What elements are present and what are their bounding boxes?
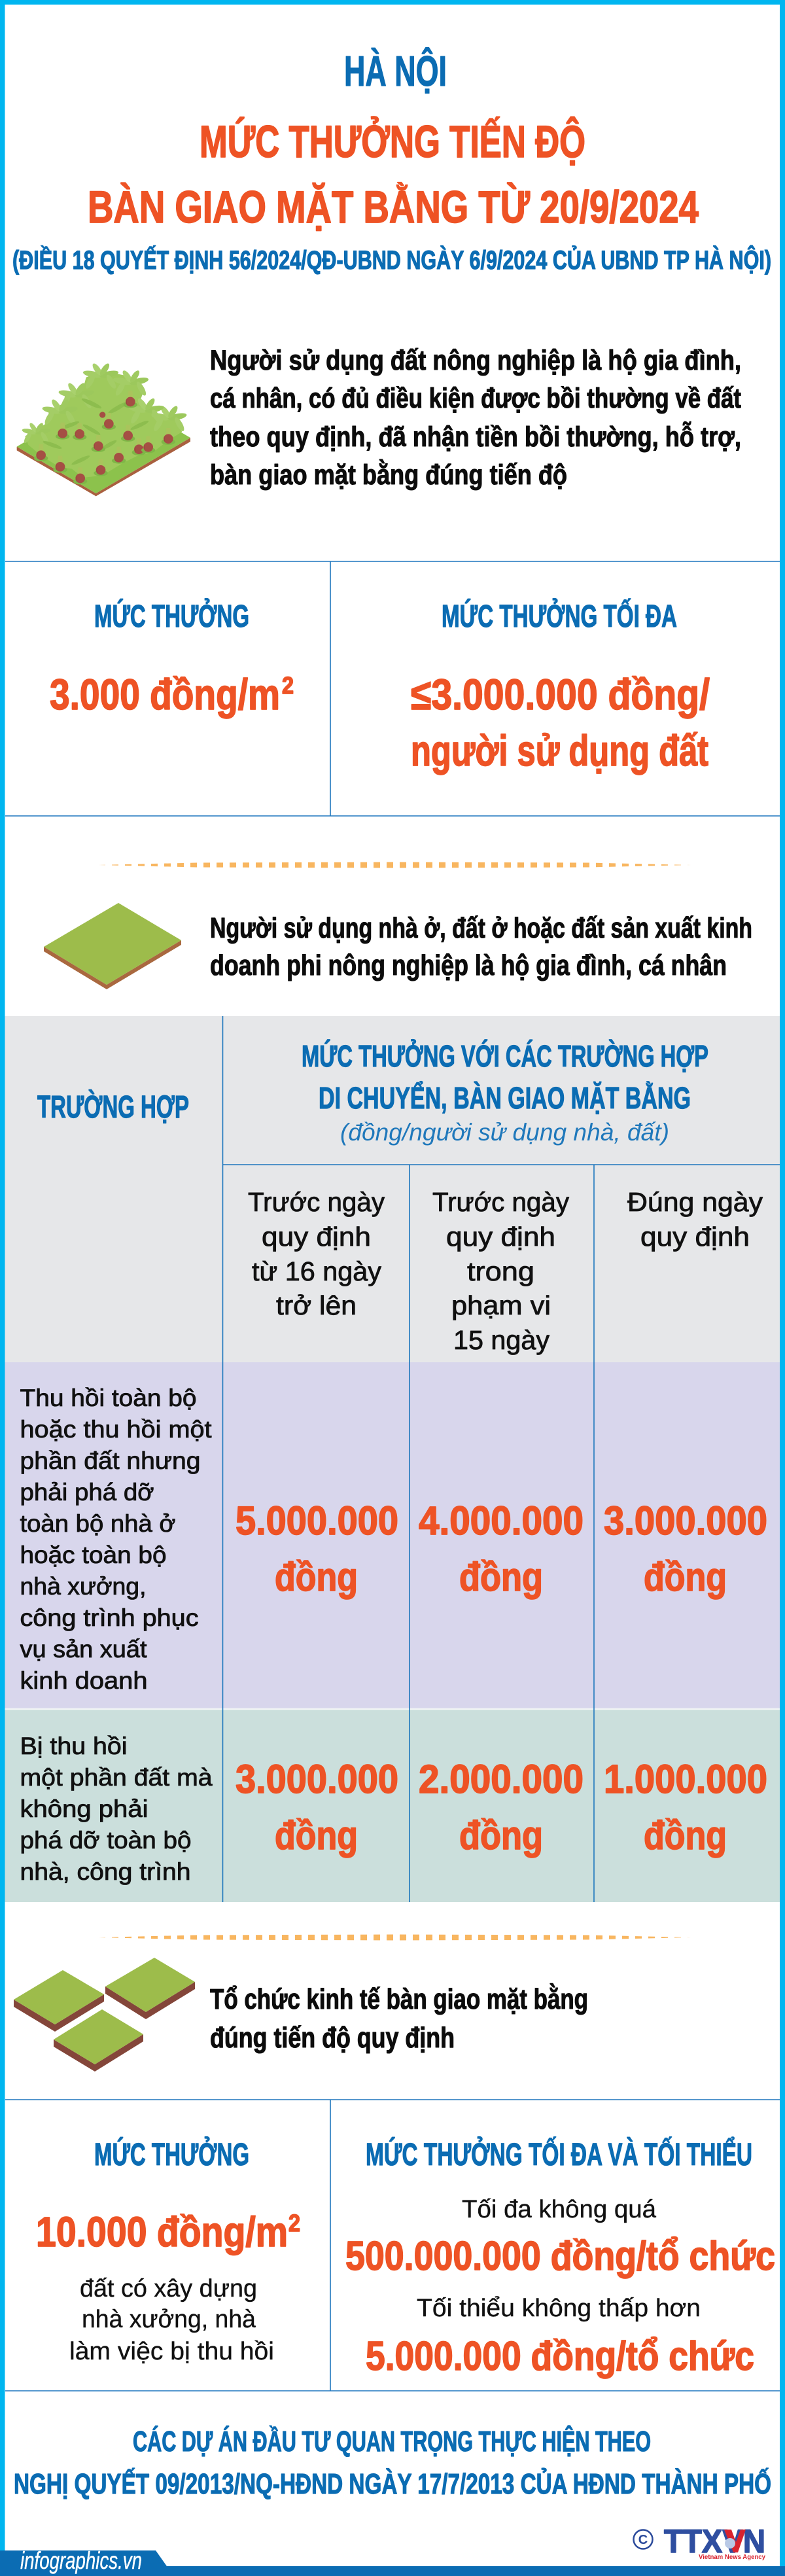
row 1 values: 3.000.000 <box>604 1498 767 1543</box>
row label: full recovery <box>20 1385 212 1694</box>
row label: full recovery: phần đất nhưng <box>20 1447 200 1474</box>
note: land with buildings <box>69 2275 274 2365</box>
column: 16 days or more before: từ 16 ngày <box>252 1256 381 1286</box>
footer bar: infographics.vn <box>0 2547 785 2576</box>
logo: TTXVN: C <box>638 2533 648 2547</box>
row label: full recovery: toàn bộ nhà ở <box>20 1510 175 1537</box>
row label: full recovery: hoặc thu hồi một <box>20 1416 212 1443</box>
text block: agricultural land users: bàn giao mặt bằng đúng tiến độ <box>210 459 567 491</box>
column: on the set date: quy định <box>640 1222 750 1252</box>
row label: full recovery: công trình phục <box>20 1604 199 1631</box>
column: 16 days or more before: Trước ngày <box>248 1187 385 1217</box>
heading: reward level: MỨC THƯỞNG <box>94 598 249 634</box>
row label: partial recovery: phá dỡ toàn bộ <box>20 1827 191 1854</box>
row 2 values: đồng <box>644 1813 727 1858</box>
text block: economic organisations: đúng tiến độ quy định <box>210 2022 455 2054</box>
logo: TTXVN: TTXVN <box>664 2523 765 2560</box>
divider <box>99 1934 690 1941</box>
column: within 15 days before: phạm vi <box>451 1290 551 1320</box>
row label: full recovery: Thu hồi toàn bộ <box>20 1385 196 1411</box>
row label: partial recovery: không phải <box>20 1795 148 1822</box>
column: within 15 days before: 15 ngày <box>453 1325 550 1355</box>
note: land with buildings: đất có xây dựng <box>80 2275 257 2303</box>
row 1 values: đồng <box>275 1555 358 1599</box>
column: 16 days or more before: quy định <box>262 1222 371 1252</box>
logo: TTXVN: Vietnam News Agency <box>699 2554 765 2561</box>
superscript: 2 <box>282 672 294 699</box>
label: maximum: Tối đa không quá <box>462 2196 657 2223</box>
row 2 values <box>236 1757 767 1858</box>
row 2 values: đồng <box>275 1813 358 1858</box>
text block: residential land users <box>210 912 752 981</box>
column: on the set date: Đúng ngày <box>627 1187 763 1217</box>
heading: Hà Nội: HÀ NỘI <box>344 47 447 95</box>
row label: full recovery: hoặc toàn bộ <box>20 1542 166 1568</box>
row 1 values: đồng <box>644 1555 727 1599</box>
title block <box>12 47 771 275</box>
text block: agricultural land users <box>210 345 741 491</box>
row 1 values: 5.000.000 <box>236 1498 398 1543</box>
footer note: key investment projects <box>14 2425 771 2500</box>
footer bar: infographics.vn: infographics.vn <box>20 2547 142 2574</box>
row label: partial recovery: một phần đất mà <box>20 1764 213 1791</box>
icon: palm plantation plot <box>17 362 190 496</box>
row 2 values: 3.000.000 <box>236 1757 398 1801</box>
note: land with buildings: làm việc bị thu hồi <box>69 2338 274 2365</box>
column: 16 days or more before: trở lên <box>276 1290 357 1320</box>
row label: full recovery: nhà xưởng, <box>20 1573 147 1600</box>
row label: full recovery: phải phá dỡ <box>20 1479 154 1506</box>
column: 16 days or more before <box>248 1187 385 1320</box>
row label: partial recovery: Bị thu hồi <box>20 1733 127 1759</box>
superscript: 2 <box>288 2210 300 2236</box>
column header: case: TRƯỜNG HỢP <box>37 1089 189 1125</box>
value: maximum reward amount: ≤3.000.000 đồng/ <box>411 670 710 718</box>
panel: agricultural land reward <box>5 561 780 816</box>
icon: three land plots <box>14 1958 195 2072</box>
text block: economic organisations <box>210 1983 588 2054</box>
column: within 15 days before <box>432 1187 569 1355</box>
column: within 15 days before: quy định <box>446 1222 555 1252</box>
row label: partial recovery <box>20 1733 213 1885</box>
column header: reward group <box>302 1039 708 1146</box>
row 2 values: 2.000.000 <box>419 1757 584 1801</box>
column: within 15 days before: Trước ngày <box>432 1187 569 1217</box>
panel: organisation reward <box>5 2100 780 2391</box>
label: minimum: Tối thiểu không thấp hơn <box>417 2295 701 2322</box>
divider <box>99 862 690 868</box>
heading: maximum reward: MỨC THƯỞNG TỐI ĐA <box>442 598 677 634</box>
column header: reward group: (đồng/người sử dụng nhà, đất) <box>340 1119 669 1146</box>
row 2 values: 1.000.000 <box>604 1757 767 1801</box>
note: land with buildings: nhà xưởng, nhà <box>82 2306 256 2333</box>
icon: flat land plot <box>44 903 181 989</box>
heading: reward level: MỨC THƯỞNG <box>94 2136 249 2172</box>
row 1 values <box>236 1498 767 1599</box>
value: reward per square metre: 10.000 đồng/m <box>36 2208 288 2255</box>
row label: full recovery: kinh doanh <box>20 1667 148 1694</box>
text block: economic organisations: Tổ chức kinh tế bàn giao mặt bằng <box>210 1983 588 2015</box>
column: on the set date <box>627 1187 763 1252</box>
heading: reward title line 1: MỨC THƯỞNG TIẾN ĐỘ <box>200 116 585 167</box>
row label: full recovery: vụ sản xuất <box>20 1636 147 1663</box>
row 1 values: đồng <box>459 1555 543 1599</box>
table: reward by case <box>5 1016 780 1902</box>
column: within 15 days before: trong <box>467 1256 534 1286</box>
row 1 values: 4.000.000 <box>419 1498 584 1543</box>
value: reward per square metre: 3.000 đồng/m <box>50 670 280 718</box>
row 2 values: đồng <box>459 1813 543 1858</box>
row label: partial recovery: nhà, công trình <box>20 1858 191 1885</box>
